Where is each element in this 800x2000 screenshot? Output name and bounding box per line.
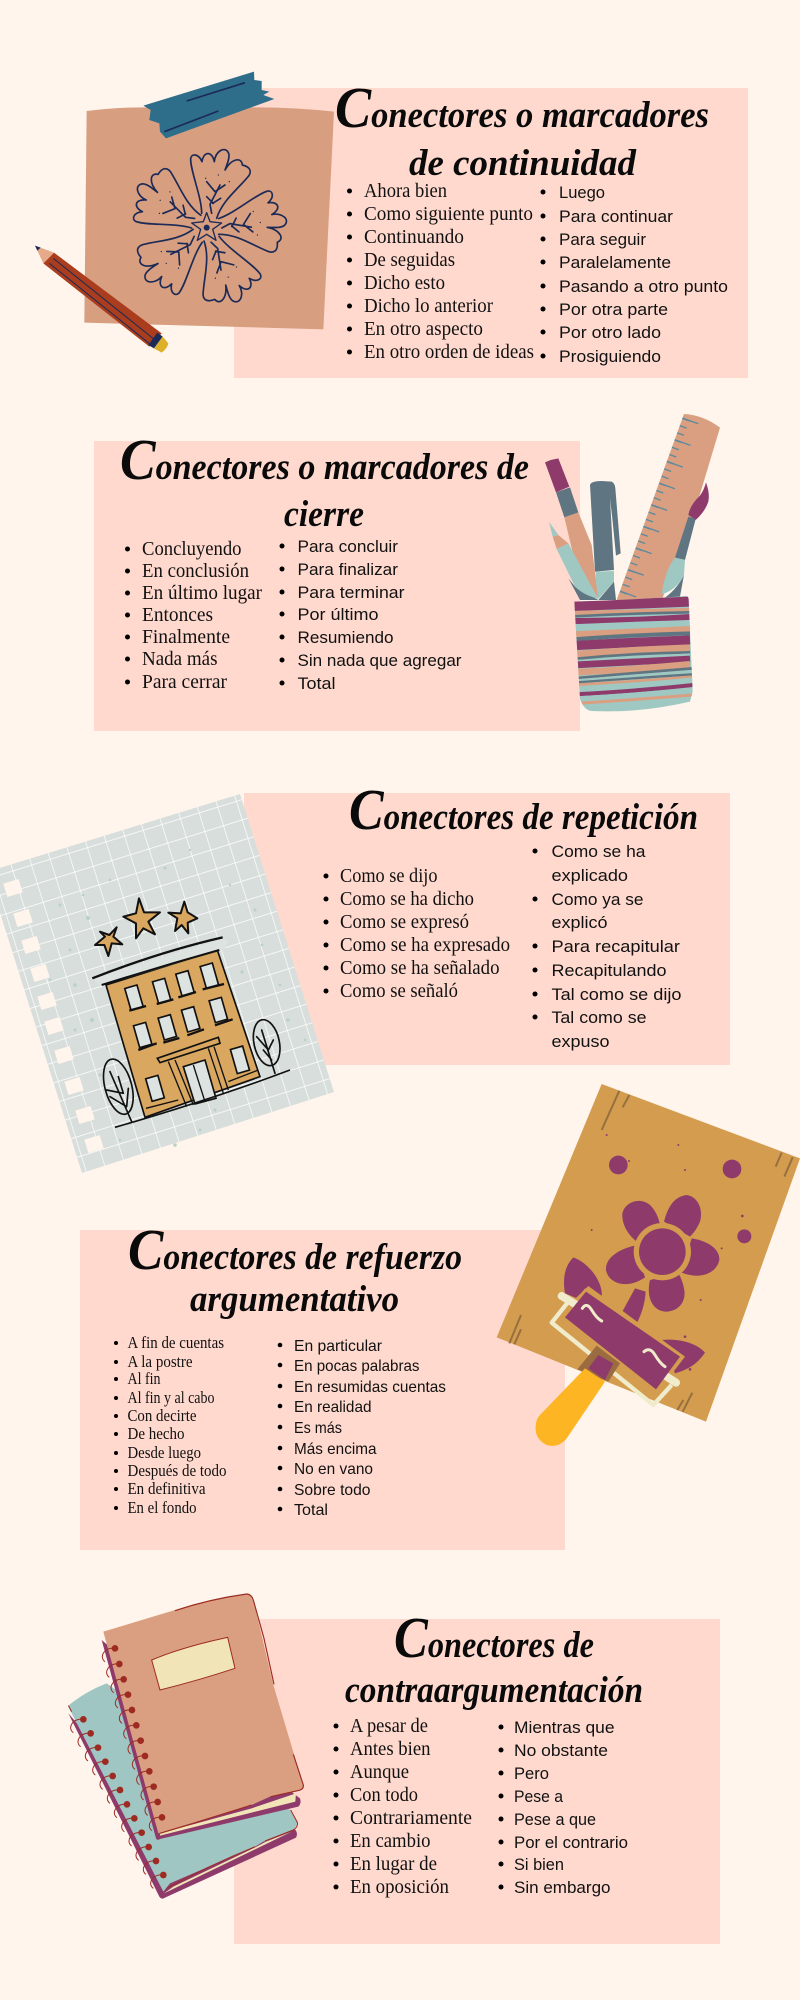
heading: refuerzo argumentativo [128,1217,462,1320]
list: refuerzo column 1: Con decirte [128,1406,196,1425]
list: contraargumentacion column 2: Pese a que [514,1810,596,1829]
list: cierre column 2: Para concluir [298,537,398,556]
left brush [545,458,598,599]
list: continuidad column 1: Dicho lo anterior [364,295,493,317]
list: cierre column 2: Por último [298,605,378,624]
list: continuidad column 2: Prosiguiendo [559,347,661,366]
grid paper [0,794,334,1173]
list: refuerzo column 1 [114,1333,226,1517]
ruler [617,414,720,600]
illustration: grid paper with hotel building [0,794,334,1173]
list: cierre column 1: Entonces [142,604,213,626]
list: contraargumentacion column 1: Con todo [350,1784,418,1806]
heading: contraargumentacion: Conectores de [394,1605,594,1670]
list: repeticion column 2: explicó [552,913,608,932]
list: cierre column 1: Nada más [142,648,218,670]
list: refuerzo column 1: Al fin [128,1369,160,1388]
list: refuerzo column 2: En realidad [294,1399,372,1416]
list: refuerzo column 2: Sobre todo [294,1482,371,1499]
heading: cierre: cierre [284,494,364,535]
list: continuidad column 1: Ahora bien [364,180,447,202]
stars [95,898,197,956]
list: repeticion column 1 [324,865,510,1002]
list: continuidad column 2: Para continuar [559,207,673,226]
flower drawing [125,150,294,316]
list: continuidad column 2: Para seguir [559,230,646,249]
list: refuerzo column 2: Más encima [294,1441,377,1458]
list: cierre column 1 [125,538,262,693]
heading: refuerzo argumentativo: Conectores de refuerzo [128,1217,462,1282]
heading: contraargumentacion [345,1605,643,1711]
heading: contraargumentacion: contraargumentación [345,1670,643,1711]
list: continuidad column 1: En otro aspecto [364,318,483,340]
list: contraargumentacion column 1: En lugar de [350,1853,437,1875]
list: continuidad column 2: Por otro lado [559,323,661,342]
striped cup [574,596,693,712]
heading: continuidad [335,75,709,184]
illustration: paper with flower, tape and pencil [35,72,334,353]
list: continuidad column 1: Como siguiente punto [364,203,533,225]
list: cierre column 2: Para terminar [298,583,405,602]
list: contraargumentacion column 1: Antes bien [350,1738,430,1760]
list: cierre column 1: En conclusión [142,560,249,582]
illustration: two spiral notebooks [68,1594,303,1899]
panel: conectores de contraargumentacion [234,1605,720,1944]
panel: conectores de refuerzo argumentativo [80,1217,565,1550]
list: contraargumentacion column 2: Si bien [514,1855,564,1874]
printed flower [564,1134,751,1373]
pencil [549,522,598,600]
paper sheet [84,107,334,329]
list: continuidad column 2: Por otra parte [559,300,668,319]
list: continuidad column 1 [347,180,534,363]
building [92,937,290,1127]
list: continuidad column 2: Luego [559,183,605,202]
back notebook [68,1683,298,1899]
list: contraargumentacion column 2: Mientras que [514,1718,614,1737]
list: refuerzo column 1: De hecho [128,1424,184,1443]
list: refuerzo column 2: Es más [294,1420,342,1437]
heading: repeticion: Conectores de repetición [349,777,698,842]
list: refuerzo column 2: Total [294,1502,328,1519]
list: repeticion column 2: Recapitulando [552,961,666,980]
list: cierre column 1: Finalmente [142,626,230,648]
list: cierre column 1: En último lugar [142,582,262,604]
list: cierre column 1: Para cerrar [142,671,227,693]
list: continuidad column 1: Continuando [364,226,464,248]
trees [98,1017,284,1122]
list: contraargumentacion column 2: Pese a [514,1787,563,1806]
list: cierre column 2: Total [298,674,336,693]
list: refuerzo column 2: En particular [294,1338,383,1355]
list: continuidad column 1: De seguidas [364,249,455,271]
list: repeticion column 1: Como se ha expresado [340,934,510,956]
list: contraargumentacion column 2: Sin embargo [514,1878,610,1897]
list: continuidad column 1: Dicho esto [364,272,445,294]
list: repeticion column 2: expuso [552,1032,610,1051]
list: contraargumentacion column 2 [498,1718,628,1897]
list: repeticion column 2: Como ya se [552,890,644,909]
roller handle [536,1346,620,1446]
list: contraargumentacion column 1: En oposición [350,1876,449,1898]
front notebook [102,1594,303,1840]
list: refuerzo column 1: En definitiva [128,1479,206,1498]
list: cierre column 1: Concluyendo [142,538,242,560]
list: cierre column 2: Sin nada que agregar [298,651,462,670]
pen [590,481,621,600]
heading: refuerzo argumentativo: argumentativo [190,1279,399,1320]
list: refuerzo column 2 [278,1338,446,1519]
illustration: printing board with flower and roller [497,1084,800,1446]
heading: continuidad: de continuidad [409,143,636,184]
roller [552,1286,685,1405]
tape [143,72,274,138]
notebook label [152,1637,235,1690]
list: repeticion column 2: explicado [552,866,628,885]
board [497,1084,800,1422]
list: continuidad column 1: En otro orden de ideas [364,341,534,363]
list: repeticion column 1: Como se señaló [340,980,458,1002]
list: refuerzo column 1: Al fin y al cabo [128,1388,214,1407]
list: repeticion column 2: Tal como se dijo [552,985,682,1004]
list: repeticion column 1: Como se dijo [340,865,438,887]
list: continuidad column 2: Pasando a otro punto [559,277,728,296]
list: repeticion column 2: Tal como se [552,1008,646,1027]
list: contraargumentacion column 2: Por el contrario [514,1833,628,1852]
list: contraargumentacion column 2: Pero [514,1764,549,1783]
list: cierre column 2: Resumiendo [298,628,394,647]
list: contraargumentacion column 1: Aunque [350,1761,409,1783]
heading: cierre: Conectores o marcadores de [120,427,529,492]
panel: conectores de cierre [94,427,580,731]
list: contraargumentacion column 2: No obstante [514,1741,608,1760]
list: cierre column 2 [280,537,462,693]
list: refuerzo column 1: Después de todo [128,1461,226,1480]
list: cierre column 2: Para finalizar [298,560,398,579]
list: continuidad column 2 [540,183,728,366]
punched holes [3,879,104,1153]
list: repeticion column 1: Como se expresó [340,911,469,933]
list: refuerzo column 1: Desde luego [128,1443,201,1462]
list: contraargumentacion column 1: En cambio [350,1830,430,1852]
list: contraargumentacion column 1: Contrariamente [350,1807,472,1829]
list: refuerzo column 2: En pocas palabras [294,1358,420,1375]
panel: conectores de repeticion [244,777,730,1065]
list: refuerzo column 1: En el fondo [128,1498,196,1517]
list: repeticion column 1: Como se ha señalado [340,957,500,979]
list: repeticion column 2: Para recapitular [552,937,680,956]
list: repeticion column 2 [532,842,682,1051]
list: contraargumentacion column 1 [334,1715,472,1898]
list: repeticion column 1: Como se ha dicho [340,888,474,910]
pencil [35,246,168,353]
list: repeticion column 2: Como se ha [552,842,646,861]
heading: cierre [120,427,529,535]
heading: continuidad: Conectores o marcadores [335,75,709,140]
list: contraargumentacion column 1: A pesar de [350,1715,428,1737]
list: refuerzo column 2: No en vano [294,1461,373,1478]
right brush [662,482,709,600]
list: refuerzo column 1: A fin de cuentas [128,1333,224,1352]
list: refuerzo column 1: A la postre [128,1352,192,1371]
illustration: cup with ruler, pen, pencil and brushes [545,414,720,717]
panel: conectores de continuidad [234,75,748,378]
list: continuidad column 2: Paralelamente [559,253,671,272]
list: refuerzo column 2: En resumidas cuentas [294,1379,446,1396]
